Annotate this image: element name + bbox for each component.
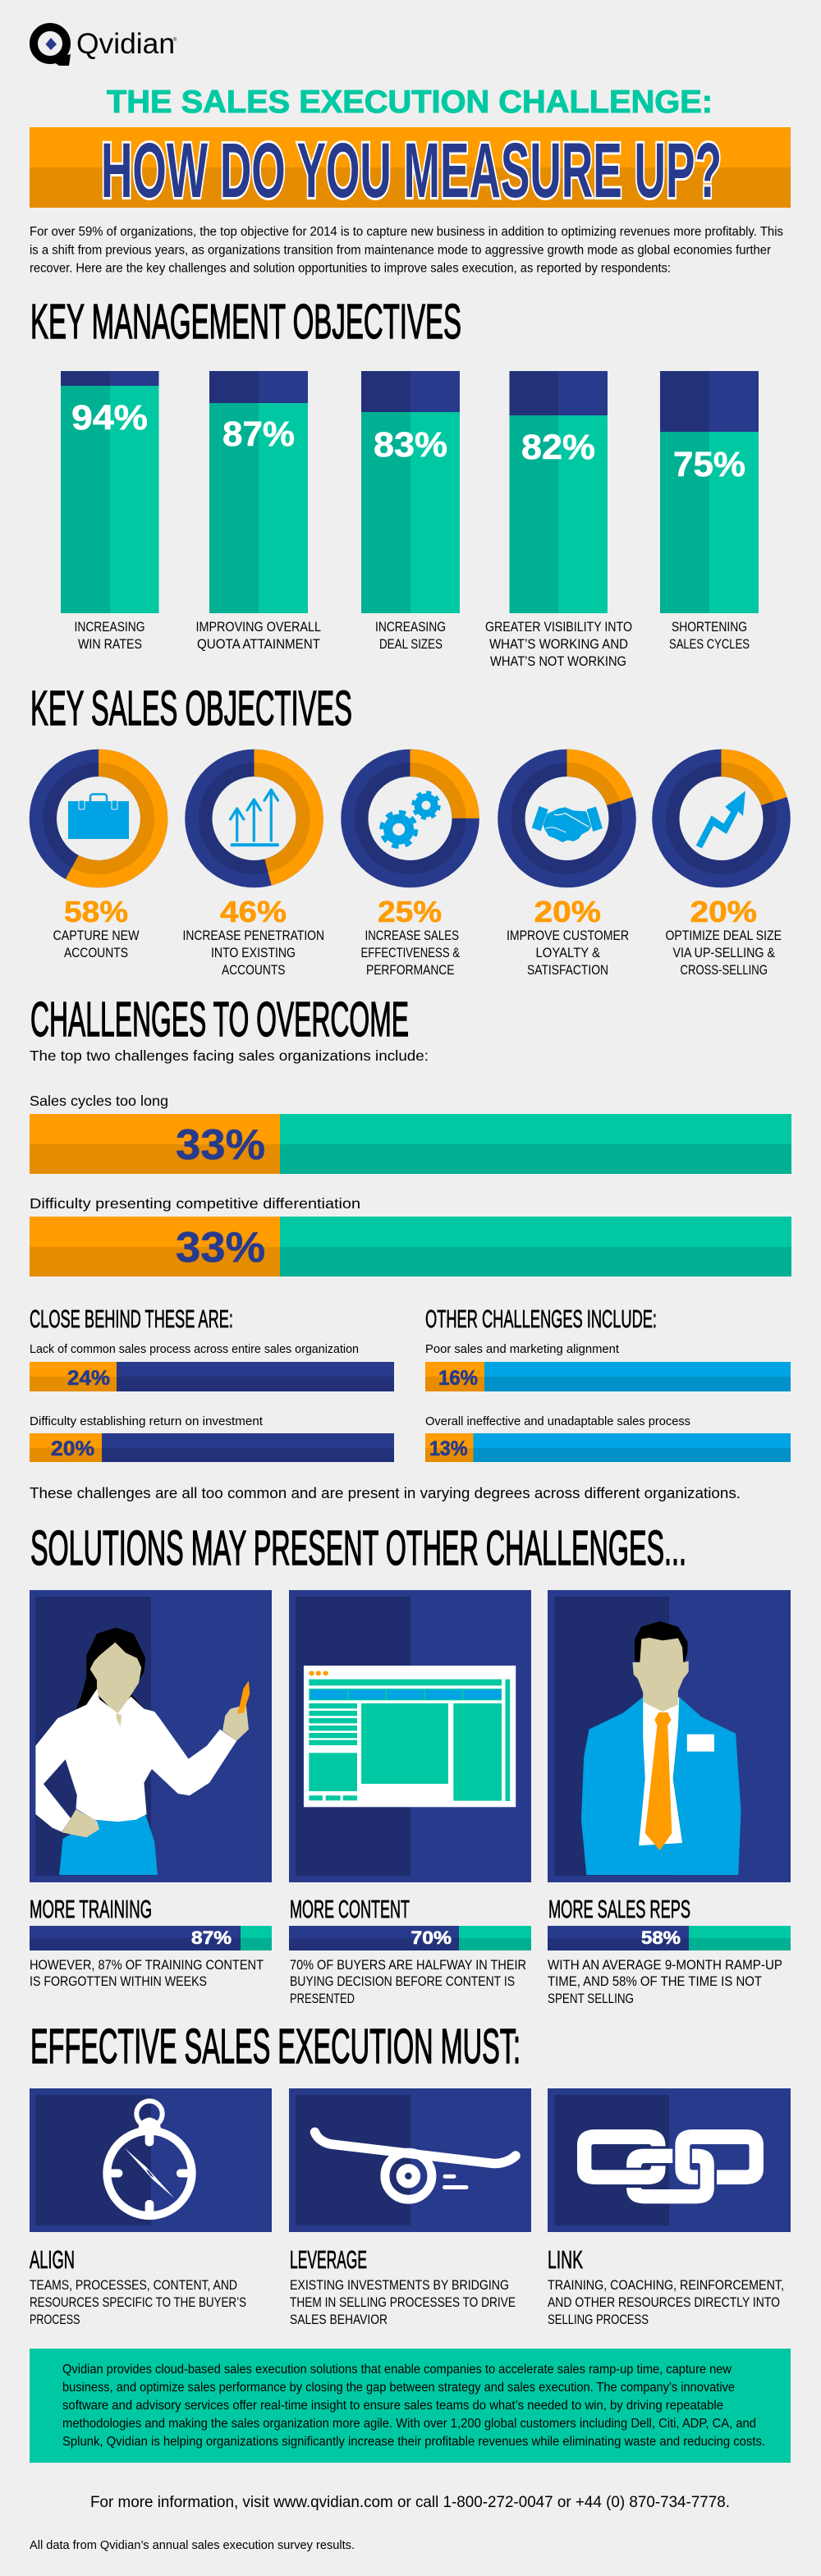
bar: sales cycles too long 33%: Sales cycles too long	[30, 1093, 168, 1109]
donut: improve customer loyalty 20%	[504, 756, 629, 978]
intro text: For over 59% of organizations, the top objective for 2014 is to capture new business in addition to optimizing revenues more profitably. This	[30, 225, 783, 239]
callout: about Qvidian: Qvidian provides cloud-based sales execution solutions that enable companies to accelerate sales ramp-up time, capture new	[62, 2363, 732, 2377]
bar: difficulty presenting competitive differentiation 33%: Difficulty presenting competitive differentiation	[30, 1195, 360, 1212]
bar: difficulty establishing ROI 20%	[30, 1415, 394, 1462]
icon: briefcase	[68, 795, 129, 839]
donut: capture new accounts 58%: CAPTURE NEW	[53, 928, 140, 943]
heading: key management objectives: KEY MANAGEMENT OBJECTIVES	[30, 295, 461, 349]
intro text: recover. Here are the key challenges and solution opportunities to improve sales execution, as reported by respondents:	[30, 261, 671, 276]
heading: align: ALIGN	[30, 2245, 75, 2274]
icon: salesman	[581, 1621, 741, 1875]
heading: close behind: CLOSE BEHIND THESE ARE:	[30, 1304, 233, 1333]
bar: increasing win rates 94%: WIN RATES	[78, 637, 142, 652]
bar: 70%: 70%	[410, 1927, 452, 1948]
bar: increasing deal sizes 83%: INCREASING	[375, 620, 446, 635]
bar: increasing deal sizes 83%	[361, 371, 460, 652]
bar: shortening sales cycles 75%	[660, 371, 759, 652]
bar: increasing win rates 94%	[61, 371, 159, 652]
bar: increasing win rates 94%: INCREASING	[74, 620, 144, 635]
bar: poor sales and marketing alignment 16%: 16%	[438, 1367, 478, 1390]
text: align description: TEAMS, PROCESSES, CONTENT, AND	[30, 2278, 237, 2293]
text: contact information: For more information, visit www.qvidian.com or call 1-800-272-0047 or +44 (0) 870-734-7778.	[90, 2493, 730, 2511]
logo: Qvidian: Qvidian	[76, 28, 175, 60]
heading: other challenges: OTHER CHALLENGES INCLUDE:	[425, 1304, 657, 1333]
icon: woman presenter	[35, 1628, 250, 1875]
bar: sales cycles too long 33%: 33%	[176, 1121, 265, 1169]
callout: about Qvidian	[30, 2349, 791, 2463]
bar: overall ineffective sales process 13%: 13%	[429, 1437, 468, 1460]
bar: improving overall quota attainment 87%: IMPROVING OVERALL	[195, 620, 321, 635]
donut: optimize deal size 20%: VIA UP-SELLING &	[673, 946, 775, 960]
bar: difficulty establishing ROI 20%: 20%	[51, 1437, 94, 1460]
text: ramp-up time: TIME, AND 58% OF THE TIME IS NOT	[548, 1974, 762, 1989]
text: ramp-up time: SPENT SELLING	[548, 1992, 634, 2006]
heading: challenges to overcome: CHALLENGES TO OVERCOME	[30, 992, 409, 1047]
text: top two challenges: The top two challenges facing sales organizations include:	[30, 1047, 429, 1064]
text: link description: SELLING PROCESS	[548, 2312, 649, 2327]
bar: 58%: 58%	[641, 1927, 681, 1948]
text: these challenges are common: These challenges are all too common and are present in varying degrees across different organizations.	[30, 1485, 741, 1501]
intro text	[30, 225, 783, 276]
bar: lack of common sales process 24%: 24%	[67, 1367, 110, 1390]
text: training forgotten: HOWEVER, 87% OF TRAINING CONTENT	[30, 1958, 264, 1973]
bar: difficulty presenting competitive differentiation 33%: 33%	[176, 1224, 265, 1272]
text: link description: TRAINING, COACHING, REINFORCEMENT,	[548, 2278, 784, 2293]
donut: increase sales effectiveness 25%: 25%	[378, 895, 442, 928]
donut: increase sales effectiveness 25%: INCREASE SALES	[365, 928, 459, 943]
icon: compass	[107, 2101, 192, 2216]
donut: increase penetration 46%: INTO EXISTING	[211, 946, 296, 960]
donut: optimize deal size 20%: CROSS-SELLING	[680, 963, 768, 978]
heading: more content: MORE CONTENT	[290, 1895, 410, 1923]
bar: 58%	[548, 1926, 791, 1950]
bar: improving overall quota attainment 87%	[195, 371, 321, 652]
bar: 70%	[289, 1926, 531, 1950]
text: data source: All data from Qvidian’s annual sales execution survey results.	[30, 2539, 355, 2552]
icon: lever and fulcrum	[315, 2132, 516, 2199]
donut: capture new accounts 58%: ACCOUNTS	[64, 946, 128, 960]
panel: close behind these are	[30, 1304, 394, 1462]
bar: 87%: 87%	[191, 1927, 232, 1948]
bar: shortening sales cycles 75%: 75%	[673, 445, 745, 484]
text: ramp-up time	[548, 1958, 782, 2006]
text: training forgotten: IS FORGOTTEN WITHIN WEEKS	[30, 1974, 207, 1989]
bar: shortening sales cycles 75%: SHORTENING	[672, 620, 747, 635]
bar: difficulty establishing ROI 20%: Difficulty establishing return on investment	[30, 1415, 263, 1428]
text: leverage description: THEM IN SELLING PROCESSES TO DRIVE	[290, 2295, 516, 2310]
bar: greater visibility 82%: WHAT’S NOT WORKING	[490, 654, 626, 669]
panel: more training	[30, 1590, 272, 1989]
text: leverage description	[290, 2278, 516, 2327]
callout: about Qvidian: business, and optimize sales performance by closing the gap between strategy and sales execution. The company’s innovative	[62, 2381, 735, 2395]
donut: optimize deal size 20%	[658, 756, 783, 978]
intro text: is a shift from previous years, as organizations transition from maintenance mode to aggressive growth mode as global economies further	[30, 243, 771, 258]
bar: improving overall quota attainment 87%: QUOTA ATTAINMENT	[197, 637, 320, 652]
icon: rising arrows	[230, 790, 277, 845]
bar: poor sales and marketing alignment 16%	[425, 1343, 791, 1391]
bar: greater visibility 82%: WHAT’S WORKING AND	[489, 637, 628, 652]
bar: overall ineffective sales process 13%: Overall ineffective and unadaptable sales process	[425, 1415, 690, 1428]
panel: link	[548, 2088, 791, 2327]
icon: browser page layout	[304, 1666, 516, 1807]
donut: increase penetration 46%: 46%	[220, 895, 287, 928]
logo: Qvidian	[34, 27, 177, 66]
donut: improve customer loyalty 20%: SATISFACTION	[527, 963, 608, 978]
text: link description	[548, 2278, 784, 2327]
bar: lack of common sales process 24%: Lack of common sales process across entire sales organization	[30, 1343, 359, 1356]
bar: greater visibility 82%	[485, 371, 632, 669]
donut: increase penetration 46%: INCREASE PENETRATION	[182, 928, 324, 943]
heading: more training: MORE TRAINING	[30, 1895, 152, 1923]
bar: overall ineffective sales process 13%	[425, 1415, 791, 1462]
donut: optimize deal size 20%: OPTIMIZE DEAL SIZE	[665, 928, 782, 943]
heading: more sales reps: MORE SALES REPS	[548, 1895, 690, 1923]
text: training forgotten	[30, 1958, 264, 1989]
bar chart: key management objectives	[61, 371, 759, 669]
icon: chain links	[577, 2129, 764, 2203]
text: leverage description: EXISTING INVESTMENTS BY BRIDGING	[290, 2278, 509, 2293]
panel: align	[30, 2088, 272, 2327]
panel: more content	[289, 1590, 531, 2006]
donut: increase penetration 46%	[182, 756, 324, 978]
donut: improve customer loyalty 20%: LOYALTY &	[535, 946, 600, 960]
text: buyers halfway: BUYING DECISION BEFORE CONTENT IS	[290, 1974, 515, 1989]
text: buyers halfway: 70% OF BUYERS ARE HALFWAY IN THEIR	[290, 1958, 526, 1973]
icon: gears	[382, 793, 438, 846]
heading: link: LINK	[548, 2245, 583, 2274]
bar: increasing win rates 94%: 94%	[71, 398, 148, 438]
donut: capture new accounts 58%	[36, 756, 161, 960]
callout: about Qvidian: Splunk, Qvidian is helping organizations significantly increase their profitable revenues while eliminating waste and reducing costs.	[62, 2435, 765, 2449]
donut: capture new accounts 58%: 58%	[64, 895, 128, 928]
text: align description: PROCESS	[30, 2312, 80, 2327]
text: link description: AND OTHER RESOURCES DIRECTLY INTO	[548, 2295, 780, 2310]
donut: increase sales effectiveness 25%: PERFORMANCE	[366, 963, 455, 978]
bar: increasing deal sizes 83%: DEAL SIZES	[379, 637, 443, 652]
bar: greater visibility 82%: 82%	[521, 428, 595, 467]
panel: other challenges include	[425, 1304, 791, 1462]
bar: 87%	[30, 1926, 272, 1950]
text: leverage description: SALES BEHAVIOR	[290, 2312, 388, 2327]
bar: poor sales and marketing alignment 16%: Poor sales and marketing alignment	[425, 1343, 619, 1356]
donut: improve customer loyalty 20%: 20%	[534, 895, 601, 928]
bar: sales cycles too long 33%	[30, 1093, 791, 1174]
donut: increase sales effectiveness 25%	[348, 756, 473, 978]
icon: growth arrow	[696, 791, 745, 848]
bar: improving overall quota attainment 87%: 87%	[222, 415, 295, 454]
text: buyers halfway	[290, 1958, 526, 2006]
text: buyers halfway: PRESENTED	[290, 1992, 355, 2006]
panel: key sales objectives donuts	[36, 756, 783, 978]
bar: difficulty presenting competitive differentiation 33%	[30, 1195, 791, 1277]
panel: leverage	[289, 2088, 531, 2327]
bar: shortening sales cycles 75%: SALES CYCLES	[669, 637, 750, 652]
heading: leverage: LEVERAGE	[290, 2245, 367, 2274]
text: align description: RESOURCES SPECIFIC TO THE BUYER’S	[30, 2295, 246, 2310]
heading: key sales objectives: KEY SALES OBJECTIVES	[30, 681, 352, 736]
donut: optimize deal size 20%: 20%	[690, 895, 757, 928]
text: align description	[30, 2278, 246, 2327]
bar: lack of common sales process 24%	[30, 1343, 394, 1391]
bar: greater visibility 82%: GREATER VISIBILITY INTO	[485, 620, 632, 635]
panel: more sales reps	[548, 1590, 791, 2006]
bar: increasing deal sizes 83%: 83%	[374, 425, 447, 465]
donut: increase penetration 46%: ACCOUNTS	[222, 963, 286, 978]
callout: about Qvidian: software and advisory services offer real-time insight to ensure sales teams do what’s needed to win, by driving repeatable	[62, 2399, 723, 2413]
text: ramp-up time: WITH AN AVERAGE 9-MONTH RAMP-UP	[548, 1958, 782, 1973]
donut: increase sales effectiveness 25%: EFFECTIVENESS &	[361, 946, 460, 960]
icon: handshake	[532, 806, 603, 842]
panel: top challenges bars	[30, 1093, 791, 1277]
callout: about Qvidian: methodologies and making the sales organization more agile. With over 1,200 global customers including Dell, Citi, ADP, CA, and	[62, 2417, 756, 2431]
logo: Qvidian: ®	[173, 37, 177, 43]
title: THE SALES EXECUTION CHALLENGE:	[107, 85, 713, 120]
donut: improve customer loyalty 20%: IMPROVE CUSTOMER	[507, 928, 629, 943]
